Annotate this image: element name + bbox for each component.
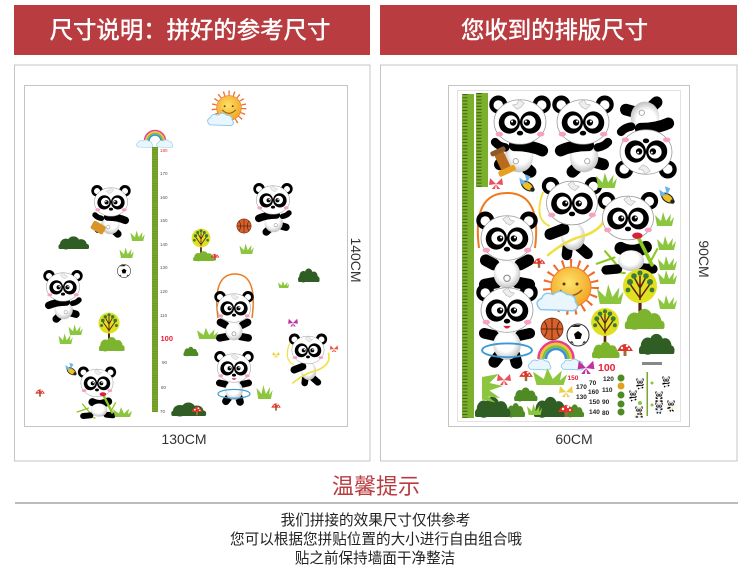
icon: dumbbell (90, 220, 107, 235)
sun with cloud (537, 263, 595, 311)
label: height 140CM: 140CM (348, 237, 364, 283)
height ruler: 140 (160, 242, 168, 247)
height numbers: 150 (568, 375, 579, 382)
height ruler: 150 (160, 218, 168, 223)
height ruler: 130 (160, 265, 168, 270)
text block: tips: 贴之前保持墙面干净整洁 (295, 550, 455, 567)
panel: assembled reference (14, 65, 370, 461)
header: received layout (380, 5, 737, 55)
height numbers (568, 362, 616, 417)
panda: skipping (214, 291, 254, 340)
label: height 90CM: 90CM (696, 240, 712, 278)
grass and small decorations (482, 173, 677, 415)
panda: brush (91, 185, 131, 234)
height numbers: 170 (576, 384, 587, 391)
panda: skipping (476, 212, 538, 288)
panel: received sheet (380, 65, 737, 461)
header: size guide: 尺寸说明：拼好的参考尺寸 (50, 17, 330, 43)
height ruler: 180 (160, 148, 168, 153)
panda: hula hoop (214, 351, 254, 402)
panda: ribbon (539, 177, 605, 255)
trees (98, 229, 219, 352)
heading: warm tips: 温馨提示 (332, 474, 420, 499)
trees (591, 269, 664, 359)
text block: tips: 我们拼接的效果尺寸仅供参考 (281, 512, 470, 529)
panda: running (552, 96, 614, 172)
label: width 130CM: 130CM (161, 431, 207, 447)
label: width 60CM: 60CM (555, 431, 593, 447)
height numbers: 130 (576, 394, 587, 401)
icon: soccer ball (117, 264, 131, 278)
icon: dumbbell (489, 145, 516, 177)
rainbow (528, 342, 584, 370)
panda: hula hoop (476, 284, 538, 363)
icon column (618, 374, 624, 416)
panda: upside down (615, 102, 677, 178)
panda: brush (489, 96, 551, 172)
grass and small decorations (35, 230, 338, 417)
panda: basketball (253, 183, 293, 232)
panda: running (43, 270, 83, 319)
height ruler: 120 (160, 289, 168, 294)
sun with cloud (208, 93, 244, 126)
icon: soccer ball (567, 324, 589, 346)
panda: bamboo (77, 366, 116, 418)
text block: tips: 您可以根据您拼贴位置的大小进行自由组合哦 (230, 531, 522, 548)
height ruler: 90 (162, 360, 168, 365)
panda: ribbon (287, 334, 329, 383)
header: received layout: 您收到的排版尺寸 (461, 17, 648, 43)
skipping rope (478, 193, 536, 248)
icon: basketball (237, 219, 251, 233)
height ruler: 70 (160, 409, 166, 414)
height numbers: 100 (598, 362, 616, 374)
height ruler: 170 (160, 171, 168, 176)
height numbers: 70 (589, 380, 597, 387)
text block: tips (230, 512, 522, 567)
height ruler: 110 (160, 313, 168, 318)
rulers (462, 93, 488, 418)
height numbers: 160 (588, 389, 599, 396)
skipping rope (217, 274, 253, 318)
height numbers: 90 (602, 399, 610, 406)
rainbow (137, 130, 173, 148)
mini preview thumbnail (629, 362, 675, 417)
height ruler: 80 (161, 385, 167, 390)
bushes (58, 236, 320, 416)
height ruler: 100 (160, 334, 173, 343)
height numbers: 140 (589, 409, 600, 416)
height numbers: 150 (589, 399, 600, 406)
bushes (475, 334, 674, 418)
height ruler (152, 147, 173, 414)
height numbers: 80 (602, 410, 610, 417)
height numbers: 120 (603, 376, 614, 383)
header: size guide (14, 5, 370, 55)
height numbers: 110 (602, 387, 613, 394)
panda: bamboo (597, 192, 658, 273)
height ruler: 160 (160, 195, 168, 200)
icon: basketball (541, 318, 563, 340)
